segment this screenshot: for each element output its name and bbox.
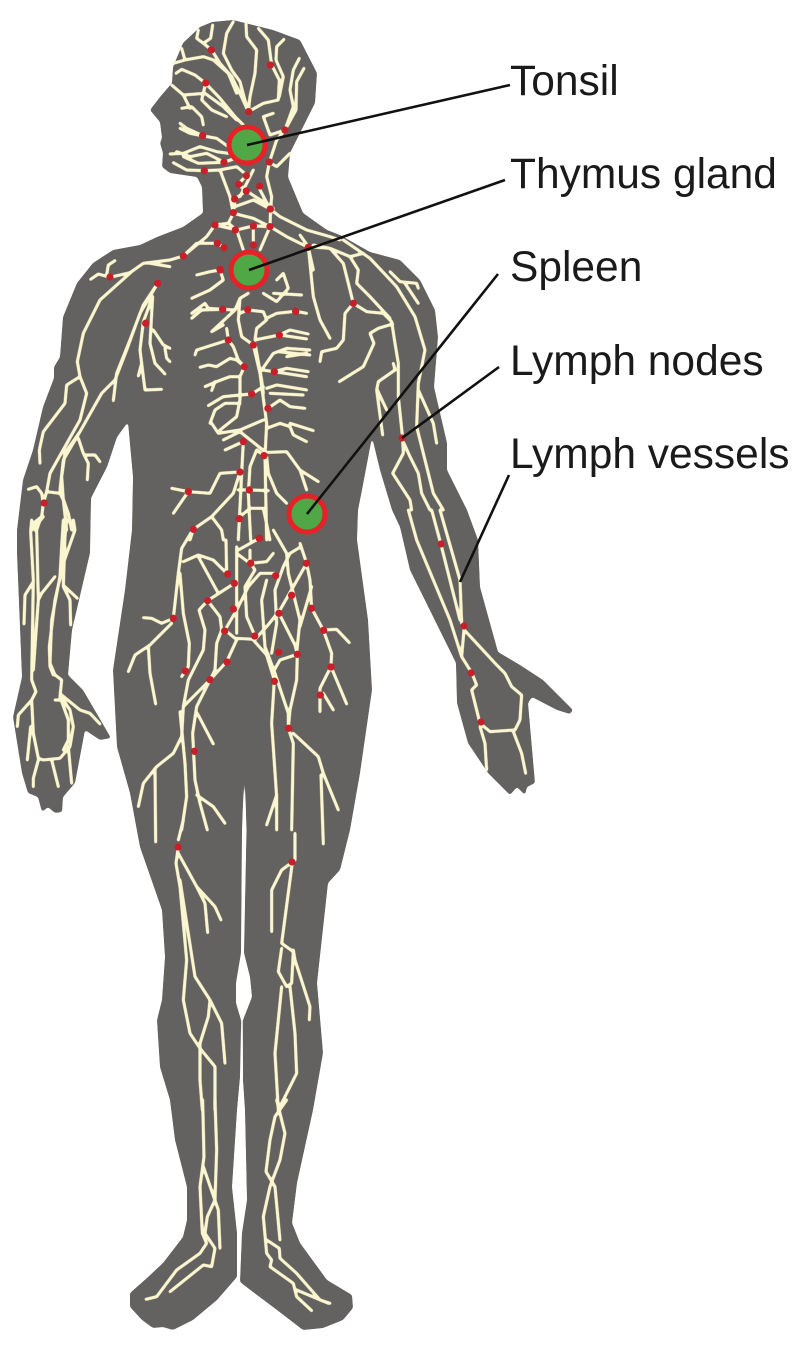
label: Spleen: Spleen (510, 244, 642, 291)
nodes: limbs (40, 273, 485, 866)
label: Tonsil: Tonsil (510, 58, 619, 105)
label: Lymph vessels: Lymph vessels (510, 431, 790, 478)
vessels: head and neck (170, 22, 340, 270)
vessels: lower legs and feet (146, 1100, 330, 1311)
organ: thymus gland (231, 252, 267, 288)
organ: tonsil (229, 127, 265, 163)
nodes: pelvis and thighs (170, 535, 335, 755)
vessels: right-side arm, upper (28, 256, 183, 530)
label: Lymph nodes: Lymph nodes (510, 338, 764, 385)
vessels: chest and abdomen (172, 270, 318, 540)
nodes: chest and abdomen (142, 266, 357, 542)
nodes: head and neck (180, 46, 312, 273)
vessels: pelvis and thighs (128, 530, 349, 844)
label: Thymus gland: Thymus gland (510, 151, 777, 198)
leader lines (247, 85, 510, 582)
lymph nodes (40, 46, 485, 866)
vessels: right-side arm, lower and hand (17, 520, 100, 787)
vessels: left-side arm, upper (300, 235, 443, 510)
vessels: knees (176, 820, 310, 1110)
vessels: left-side arm, lower and hand (408, 510, 526, 773)
body silhouette (13, 20, 573, 1330)
organ: spleen (289, 496, 325, 532)
lymph vessels (17, 22, 526, 1311)
